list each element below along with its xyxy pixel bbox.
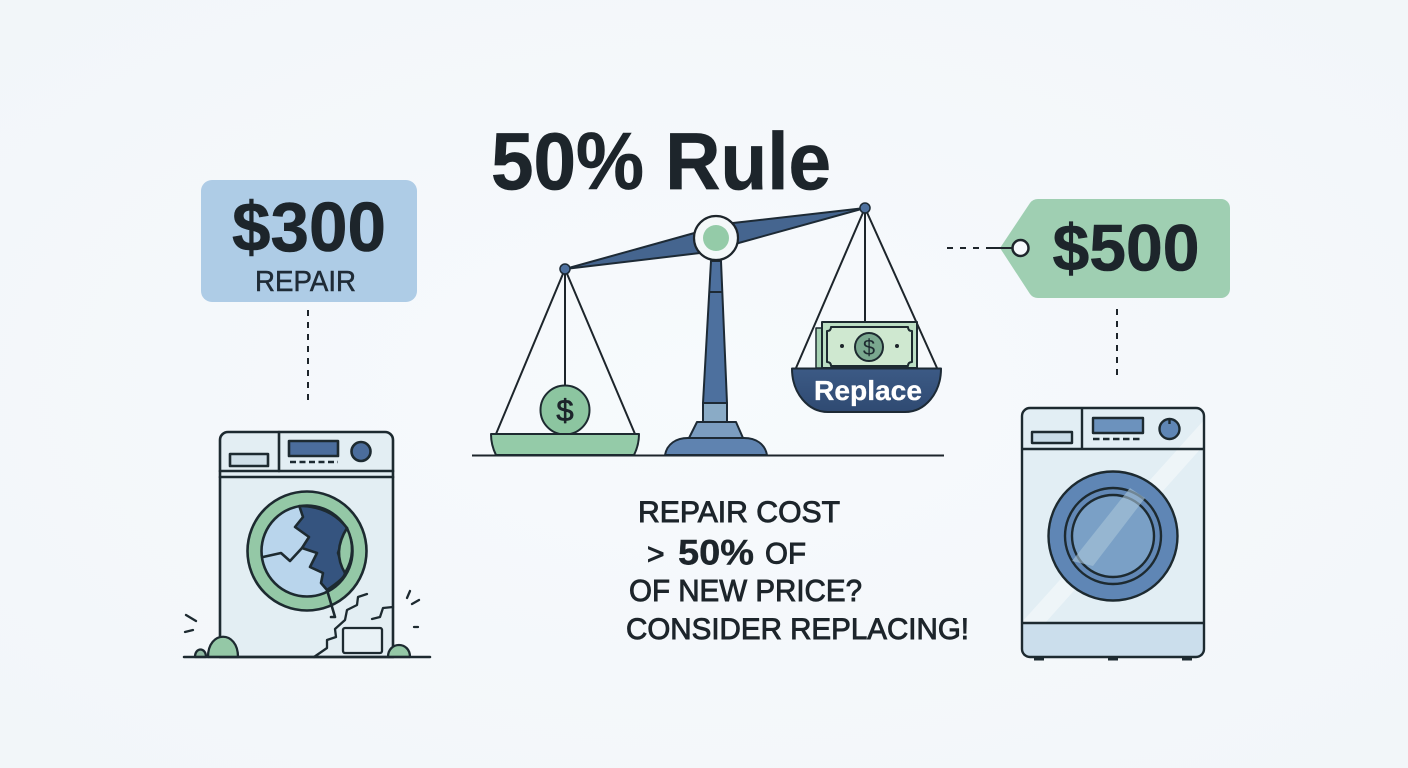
- tag string: [947, 247, 1014, 249]
- rule explanation text: REPAIR COST: [638, 496, 840, 529]
- repair price label: [201, 180, 417, 302]
- dashed connector: price tag to new washer: [1116, 309, 1118, 375]
- coin: $: [556, 393, 574, 428]
- banknotes: $: [863, 335, 875, 360]
- column: [665, 261, 767, 455]
- door: [1048, 472, 1178, 600]
- left pan: [491, 434, 639, 455]
- banknotes: [816, 322, 917, 368]
- shine: [1022, 420, 1204, 622]
- rule explanation text: >: [647, 538, 665, 571]
- tag hole: [1012, 240, 1028, 256]
- repair price label: REPAIR: [255, 266, 356, 298]
- beam: [565, 208, 865, 269]
- machine body: [220, 432, 393, 657]
- right pan: [792, 368, 941, 412]
- right pan: Replace: [814, 375, 922, 406]
- rule explanation text: CONSIDER REPLACING!: [626, 613, 969, 646]
- dashed connector: repair label to broken washer: [307, 310, 309, 406]
- repair price label: $300: [232, 188, 386, 266]
- machine body: [1022, 408, 1204, 657]
- rocks: [195, 637, 410, 657]
- base panel: [1023, 623, 1203, 656]
- ground line: [472, 454, 944, 456]
- rule explanation text: 50%: [678, 534, 754, 572]
- ground line: [184, 656, 430, 658]
- right beam end: [860, 203, 870, 213]
- rule explanation text: [626, 496, 969, 646]
- tag price: $500: [1052, 210, 1200, 284]
- broken washing machine: [184, 432, 430, 657]
- outline and panel: [1022, 408, 1204, 657]
- new washing machine: [1022, 408, 1204, 660]
- feet: [1034, 657, 1192, 660]
- cracks and debris: [185, 591, 419, 657]
- right strings: [796, 208, 937, 368]
- balance scale: [472, 203, 944, 456]
- rule explanation text: OF: [765, 538, 806, 570]
- left strings: [496, 269, 635, 434]
- door shine: [1072, 488, 1145, 566]
- new price tag: [947, 199, 1230, 298]
- rule explanation text: OF NEW PRICE?: [629, 573, 862, 608]
- coin: [540, 386, 590, 434]
- pivot: [694, 216, 738, 260]
- cracked door: [248, 492, 366, 617]
- left beam end: [560, 264, 570, 274]
- title: 50% Rule: [491, 117, 831, 207]
- control panel: [220, 432, 393, 477]
